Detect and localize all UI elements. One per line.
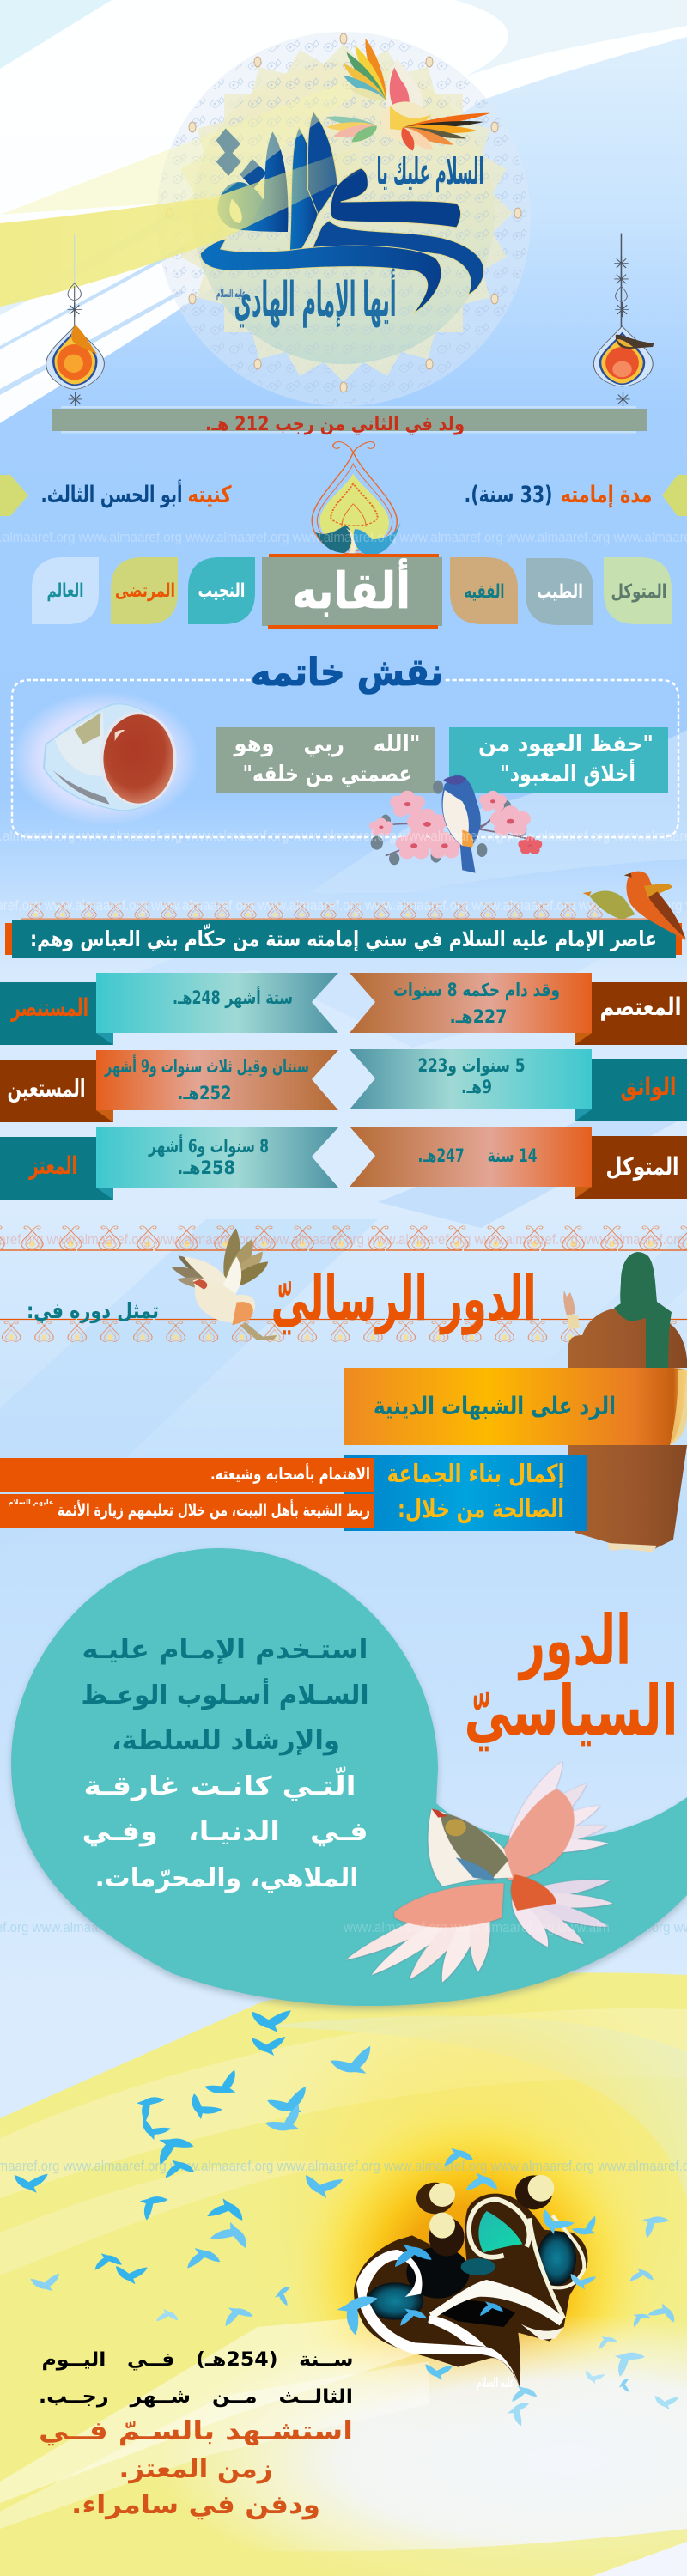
- panel: caliph Mu'tasim: وقد دام حكمه 8 سنوات: [393, 980, 560, 1000]
- calligraphy: Imam's name emblem: [354, 2175, 587, 2387]
- leaf: tayyib: [526, 558, 593, 625]
- illustration: flock of blue birds: [15, 2010, 679, 2426]
- heading: political role: الدور: [517, 1601, 631, 1681]
- bar: linking Shia to Ahl al-Bayt: عليهم السلام: [9, 1498, 54, 1506]
- panel: caliph Muntasir: [0, 973, 338, 1045]
- tag: imamate duration: مدة إمامته: [560, 482, 653, 508]
- text: martyrdom paragraph: زمن المعتز.: [119, 2454, 273, 2484]
- icon: pendant with two birds: [312, 442, 401, 556]
- inscription box: grey: "الله ربي وهو: [233, 732, 421, 757]
- leaf: faqih: [450, 557, 518, 624]
- heading: mission role: الدور الرساليّ: [271, 1262, 536, 1335]
- panel: caliph Mu'tazz: 258هـ.: [177, 1157, 235, 1178]
- ribbon: answering religious doubts: الرد على الشبهات الدينية: [374, 1392, 616, 1420]
- inscription box: teal: أخلاق المعبود": [500, 759, 635, 787]
- heading: ring inscription: نقش خاتمه: [251, 651, 443, 695]
- teal egg shape: [11, 1548, 687, 2006]
- text: martyrdom paragraph: الثالــث مــن شــهر رجــب.: [39, 2386, 353, 2408]
- text: political role paragraph: الملاهي، والمحرّمات.: [94, 1863, 359, 1893]
- birth date bar: [52, 406, 647, 435]
- tag: imamate duration: [464, 475, 687, 516]
- panel: caliph Musta'in: المستعين: [7, 1074, 86, 1103]
- panel: titles (alqab): [32, 554, 672, 629]
- tag: imamate duration: (33 سنة).: [464, 482, 553, 508]
- panel: caliph Musta'in: 252هـ.: [177, 1083, 232, 1103]
- panel: caliph Wathiq: 5 سنوات و223: [417, 1055, 526, 1076]
- panel: caliph Mu'tazz: [0, 1127, 338, 1200]
- text: his role: تمثل دوره في:: [27, 1298, 159, 1324]
- title: alqab: [262, 554, 442, 629]
- panel: caliph Mutawakkil: [350, 1127, 687, 1199]
- icon: left hanging lantern: [46, 234, 104, 407]
- bar: caring for companions: الاهتمام بأصحابه وشيعته.: [210, 1463, 370, 1484]
- tag: kunya: كنيته: [187, 482, 232, 508]
- inscription box: grey: عصمتي من خلقه": [242, 762, 412, 787]
- text: martyrdom paragraph: ودفن في سامراء.: [71, 2490, 320, 2520]
- bar: linking Shia to Ahl al-Bayt: ربط الشيعة بأهل البيت، من خلال تعليمهم زيارة الأئمة: [58, 1499, 370, 1520]
- panel: caliph Mu'tasim: [350, 973, 687, 1045]
- icon: bird on flowers: [369, 775, 542, 873]
- icon: flying beige bird: [167, 1228, 277, 1340]
- leaf: alam: [32, 557, 99, 624]
- panel: completing the community: إكمال بناء الجماعة: [386, 1459, 565, 1489]
- bar: linking Shia to Ahl al-Bayt: [0, 1494, 374, 1528]
- panel: ring inscription: [11, 651, 678, 837]
- text: martyrdom paragraph: ســنة (254هـ) فــي اليــوم: [41, 2349, 354, 2371]
- heading: contemporaries band: [5, 920, 682, 958]
- calligraphy greeting text: عليه السلام: [216, 288, 246, 301]
- panel: completing the community: [344, 1455, 587, 1531]
- icon: right hanging lantern: [593, 234, 654, 407]
- calligraphy: name of the Imam: [200, 112, 484, 313]
- panel: political role: [11, 1548, 687, 2006]
- text: political role paragraph: السـلام أسـلوب الوعـظ: [81, 1678, 369, 1710]
- panel: caliph Mu'tazz: 8 سنوات و6 أشهر: [148, 1133, 269, 1157]
- panel: caliph Mutawakkil: 14 سنة 247هـ.: [417, 1145, 538, 1166]
- text: عليه السلام: [477, 2374, 514, 2391]
- icon: colourful dove: [325, 38, 491, 154]
- panel: caliph Musta'in: سنتان وقيل ثلاث سنوات و9 أشهر: [104, 1054, 309, 1077]
- calligraphy greeting text: [216, 150, 484, 328]
- leaf: mutawakkil: [604, 557, 672, 624]
- title: alqab: ألقابه: [292, 558, 410, 620]
- panel: caliph Muntasir: المستنصر: [10, 993, 88, 1022]
- heading: political role: [464, 1601, 678, 1751]
- mandala ornament: [156, 32, 531, 406]
- leaf: najib: [188, 557, 255, 624]
- leaf: mutawakkil: المتوكل: [611, 581, 666, 603]
- inscription box: teal: [449, 727, 668, 793]
- leaf: murtada: المرتضى: [115, 580, 175, 602]
- leaf: murtada: [111, 557, 178, 624]
- leaf: alam: العالم: [46, 580, 84, 602]
- panel: caliph Mu'tasim: 227هـ.: [450, 1006, 507, 1027]
- panel: caliph Mu'tazz: المعتز: [28, 1151, 77, 1180]
- text: martyrdom paragraph: استشـهد بالسـمّ فــي: [39, 2416, 353, 2446]
- icon: agate ring: [11, 691, 199, 826]
- yellow light ray: [0, 79, 361, 307]
- icon: pink bird in flight: [339, 1759, 614, 1984]
- tag: kunya: أبو الحسن الثالث.: [41, 479, 182, 508]
- panel: caliph Musta'in: [0, 1050, 338, 1122]
- leaf: faqih: الفقيه: [464, 581, 505, 603]
- text: political role paragraph: فـي الدنيـا، وفـي: [82, 1817, 368, 1847]
- inscription box: grey: [216, 727, 435, 793]
- tag: kunya: [0, 475, 232, 516]
- panel: caliph Wathiq: [350, 1049, 687, 1121]
- birth date bar: ولد في الثاني من رجب 212 هـ.: [205, 414, 465, 435]
- text: political role paragraph: والإرشاد للسلطة،: [112, 1726, 340, 1756]
- text: martyrdom paragraph: [39, 2349, 354, 2520]
- text: political role paragraph: الّتـي كانـت غارقـة: [84, 1766, 356, 1801]
- ornament rows around prophetic role heading: [0, 1224, 687, 1342]
- text: political role paragraph: [81, 1635, 369, 1893]
- leaf: tayyib: الطيب: [537, 581, 583, 603]
- panel: political role: www.almaaref.org www.almaaref.org www.alm: [343, 1919, 610, 1935]
- bar: caring for companions: [0, 1458, 374, 1492]
- panel: caliph Wathiq: 9هـ.: [461, 1077, 492, 1097]
- ribbon: answering religious doubts: [344, 1368, 687, 1445]
- inscription box: teal: "حفظ العهود من: [478, 732, 654, 757]
- leaf: najib: النجيب: [198, 580, 246, 602]
- panel: caliph Muntasir: ستة أشهر 248هـ.: [173, 985, 293, 1008]
- text: political role paragraph: استـخدم الإمـام عليـه: [82, 1635, 368, 1665]
- yellow lower background: [0, 1949, 687, 2576]
- panel: completing the community: الصالحة من خلال:: [398, 1494, 564, 1523]
- calligraphy greeting text: أيها الإمام الهادي: [234, 268, 397, 328]
- illustration: robed figure: [563, 1252, 687, 1552]
- text: السلام عليك يا: [376, 150, 484, 193]
- icon: two perched birds: [583, 872, 685, 940]
